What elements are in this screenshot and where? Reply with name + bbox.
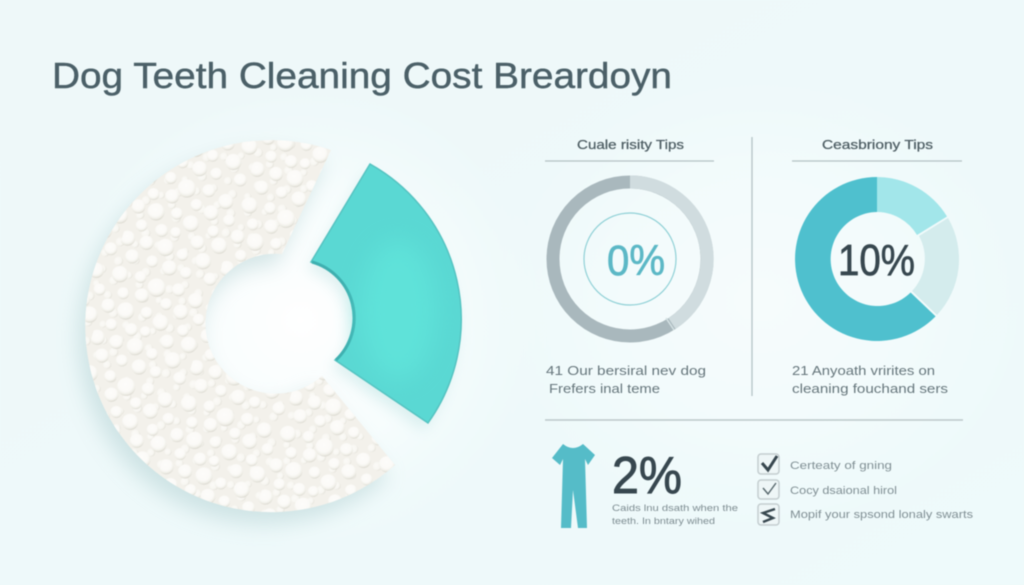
checklist item 1: [758, 454, 892, 474]
donut chart: 10%: 10%: [838, 236, 915, 285]
panel: left tips: [545, 137, 714, 396]
white textured segment: [78, 140, 395, 524]
panel: bottom stat: [552, 444, 738, 528]
panel: right tips: [792, 137, 962, 396]
caption: right tips: cleaning fouchand sers: [792, 381, 949, 396]
donut chart: 0%: [553, 182, 707, 336]
checklist item 3: [758, 504, 974, 525]
heading: right tips: Ceasbriony Tips: [822, 137, 934, 152]
checklist item 3: Mopif your spsond lonaly swarts: [790, 509, 974, 521]
teal segment: [307, 164, 461, 431]
checklist item 2: Cocy dsaional hirol: [790, 485, 897, 497]
donut chart: 0%: 0%: [607, 237, 665, 285]
chart: large segmented donut: [78, 140, 461, 524]
checklist item 2: [758, 480, 897, 499]
heading: left tips: Cuale risity Tips: [577, 137, 685, 152]
caption: right tips: [792, 363, 949, 396]
caption: left tips: [546, 363, 706, 396]
stat description: teeth. In bntary wihed: [612, 516, 715, 526]
panel: checklist: [758, 454, 974, 525]
stat description: Caids lnu dsath when the: [612, 503, 738, 513]
checklist item 1: Certeaty of gning: [790, 460, 892, 472]
caption: right tips: 21 Anyoath vrirites on: [792, 363, 935, 378]
stat description: [612, 503, 738, 526]
stat: 2%: 2%: [612, 447, 682, 505]
title: Dog Teeth Cleaning Cost Breardoyn: [52, 55, 672, 96]
icon: scrubs: [552, 444, 595, 528]
donut chart: 10%: [795, 177, 959, 341]
caption: left tips: Frefers inal teme: [549, 381, 660, 396]
caption: left tips: 41 Our bersiral nev dog: [546, 363, 706, 378]
